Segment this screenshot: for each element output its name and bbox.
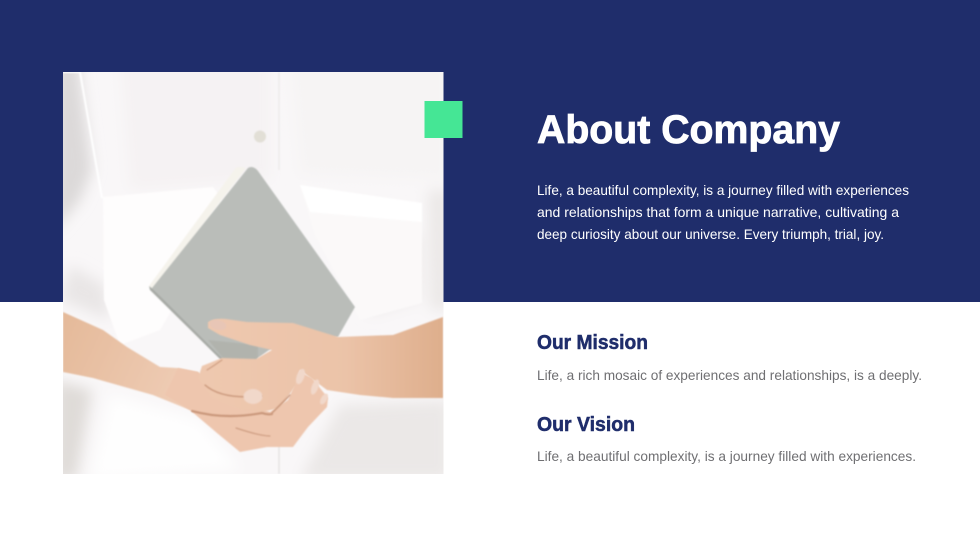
fingernails <box>243 368 328 404</box>
lower cupped hand <box>165 368 328 452</box>
pockets and seams <box>63 72 422 474</box>
photo: hands holding a book <box>55 60 450 480</box>
shirt background <box>63 72 444 302</box>
heading: our mission: Our Mission <box>537 332 648 354</box>
heading: our vision: Our Vision <box>537 414 635 436</box>
navy header band <box>0 0 980 302</box>
shirt shading <box>55 60 450 480</box>
mission text: Life, a rich mosaic of experiences and relationships, is a deeply. <box>537 368 922 383</box>
intro paragraph: and relationships that form a unique narrative, cultivating a <box>537 205 899 220</box>
intro paragraph: Life, a beautiful complexity, is a journey filled with experiences <box>537 183 909 198</box>
vision text: Life, a beautiful complexity, is a journey filled with experiences. <box>537 449 916 464</box>
title: About Company <box>537 108 841 152</box>
green accent square <box>424 101 462 138</box>
book <box>149 167 355 365</box>
left arm <box>63 312 215 410</box>
intro paragraph <box>537 183 909 242</box>
intro paragraph: deep curiosity about our universe. Every triumph, trial, joy. <box>537 227 884 242</box>
upper hand and right arm <box>198 317 443 412</box>
finger creases <box>192 360 290 436</box>
